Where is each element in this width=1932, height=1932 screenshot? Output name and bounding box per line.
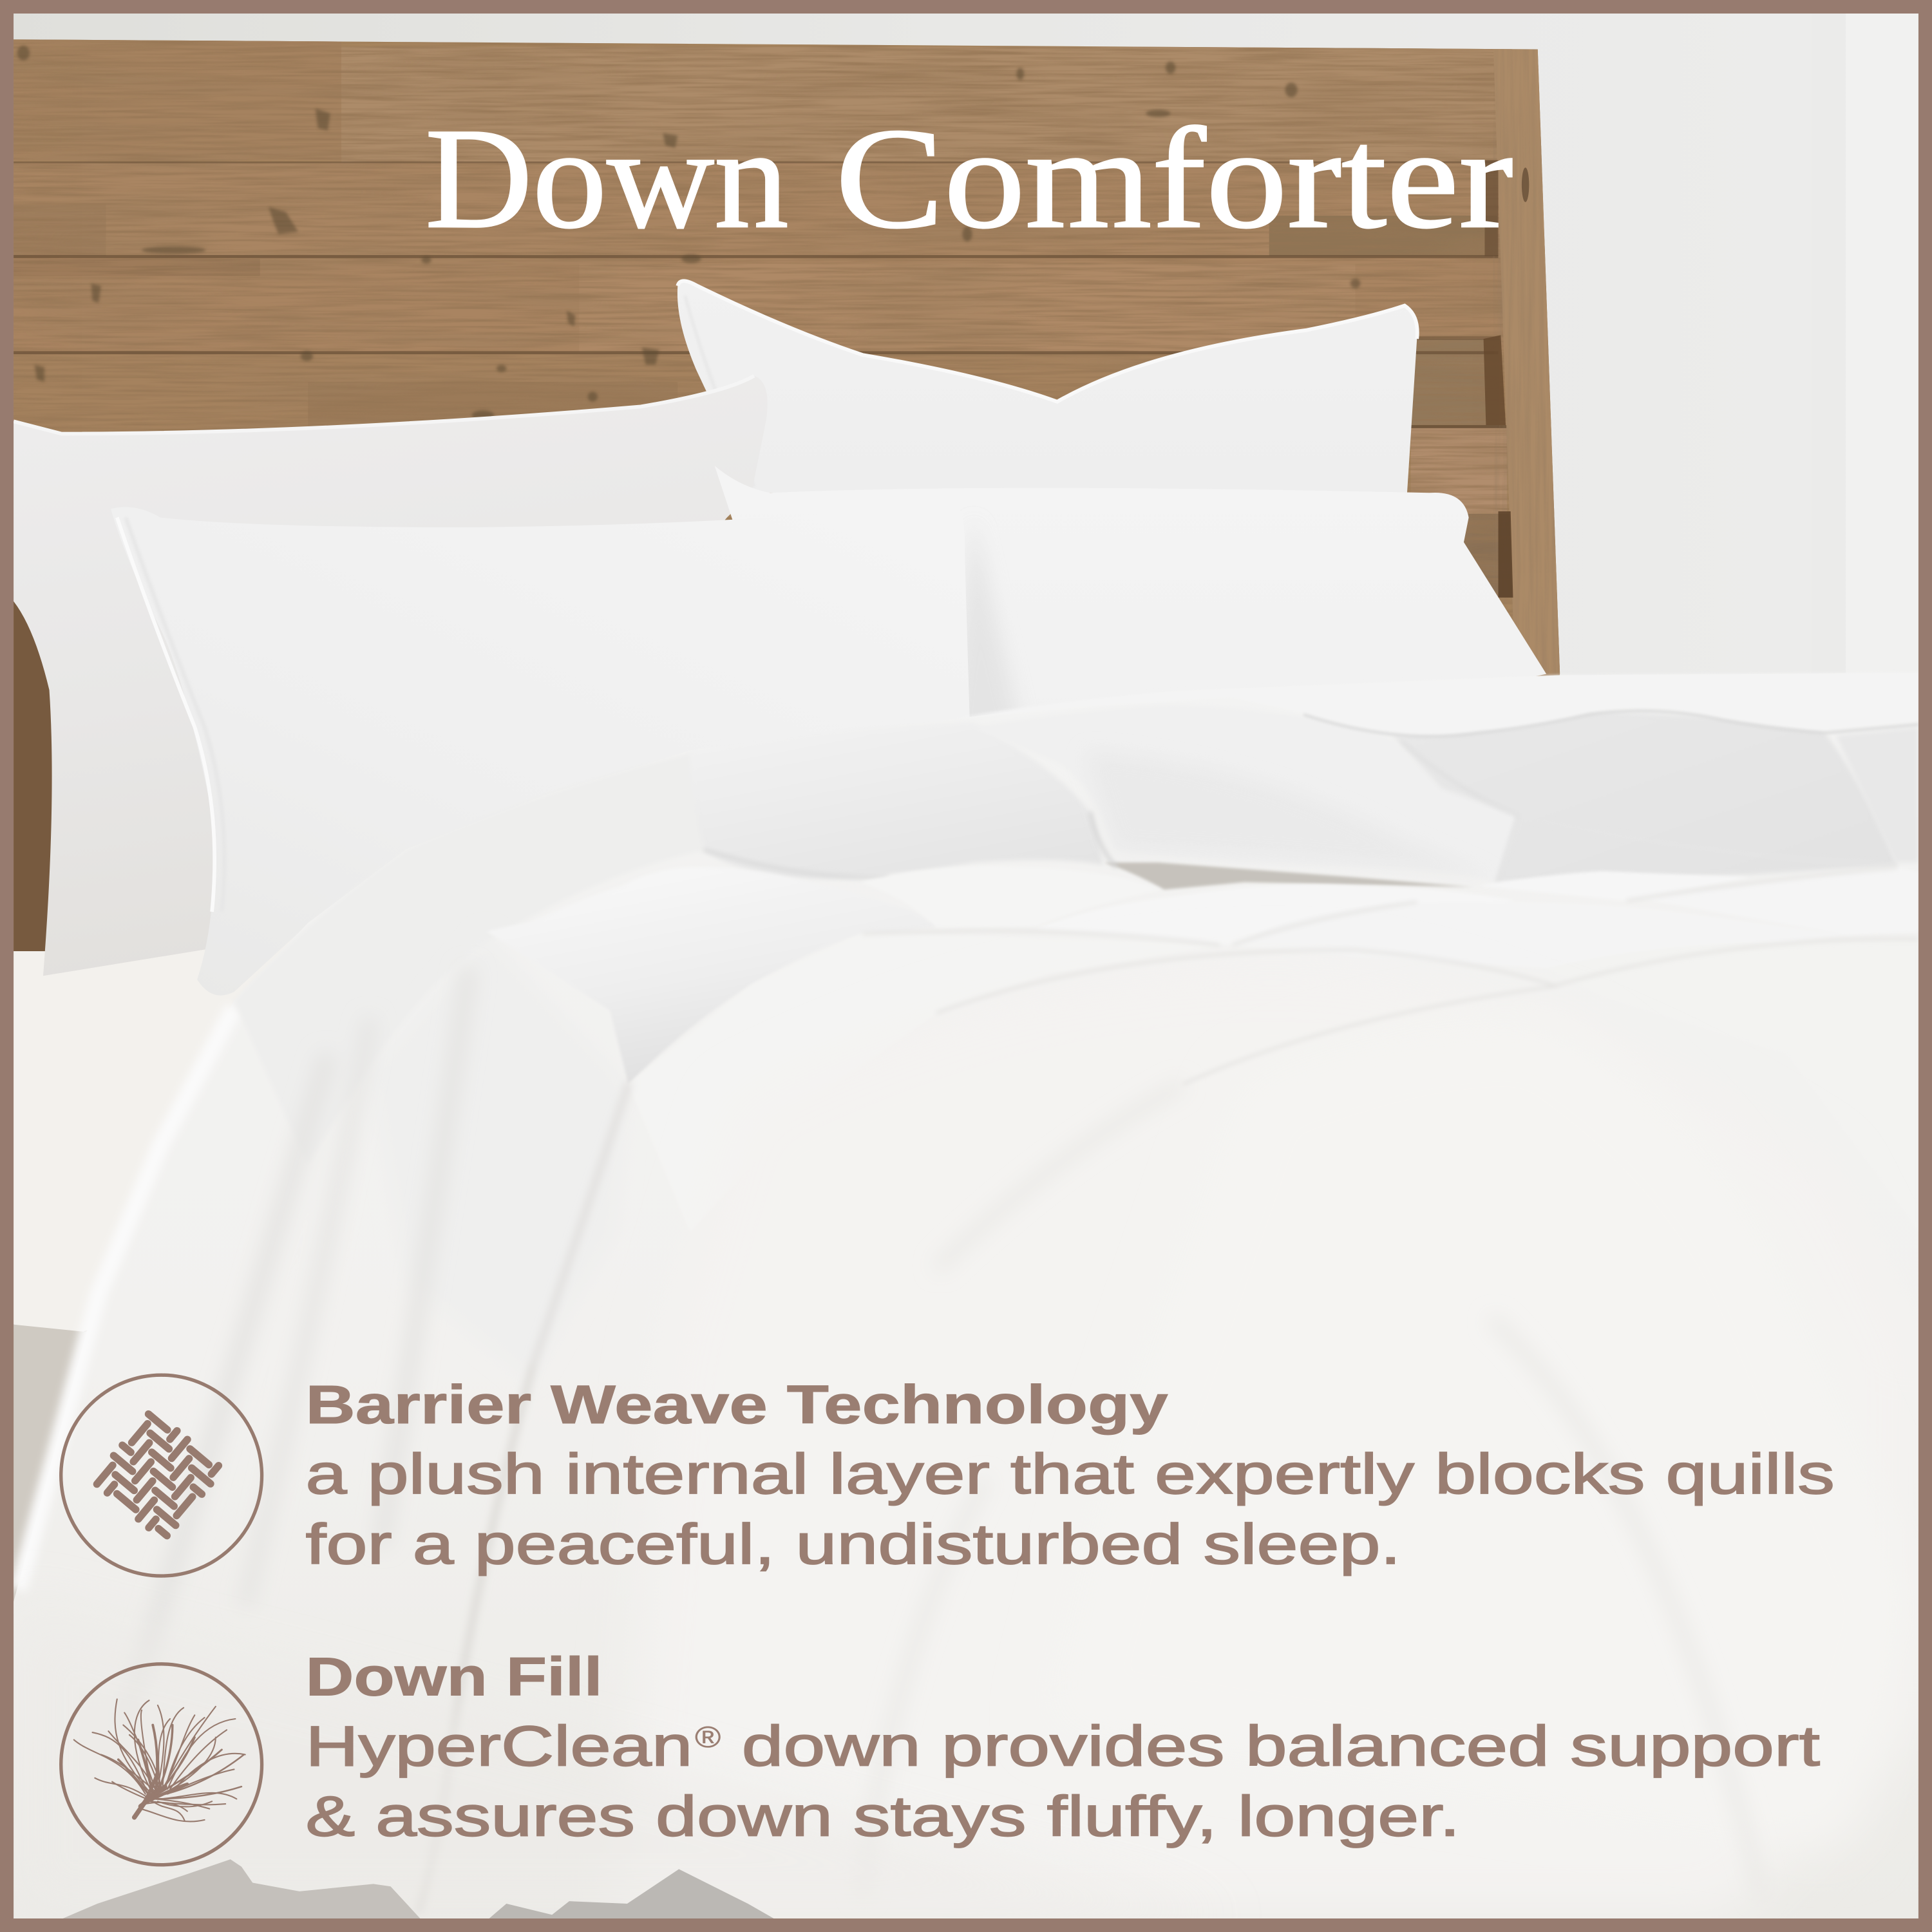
window frame at right [1811, 14, 1932, 679]
lower shading [14, 1602, 1232, 1918]
wood mottling [405, 42, 1558, 637]
description: barrier weave [305, 1442, 1835, 1576]
description: down fill: & assures down stays fluffy, longer. [305, 1785, 1460, 1848]
centre ball fold [860, 866, 1160, 929]
description: down fill [305, 1714, 1820, 1848]
wood planks [14, 39, 1513, 598]
scalloped band shadow [1303, 711, 1918, 737]
comforter bright left edge [19, 1008, 234, 1589]
feature: barrier weave technology [61, 1374, 1835, 1576]
description: down fill: HyperClean [305, 1714, 692, 1778]
description: barrier weave: a plush internal layer that expertly blocks quills [305, 1442, 1835, 1506]
icon: woven fabric [61, 1375, 262, 1576]
front pillow right [715, 466, 1546, 739]
feature: down fill [61, 1647, 1820, 1865]
title: Comforter [835, 99, 1513, 258]
knots [17, 46, 1360, 420]
creases in upper section [705, 742, 1895, 882]
floor beneath comforter hem [63, 1859, 774, 1918]
floor [14, 1325, 135, 1614]
title: Down [425, 99, 788, 258]
front left pad [629, 933, 1220, 1232]
dark crack behind ball [1104, 862, 1472, 889]
front pillow left [111, 503, 1023, 996]
wooden headboard [14, 39, 1567, 976]
main left crease [419, 1084, 629, 1910]
upper puff 2 inner shading [1084, 752, 1497, 880]
description: down fill: ® [695, 1720, 721, 1754]
lower left wood behind pillows [14, 591, 53, 961]
wood grain texture [14, 40, 1560, 667]
back pillow centre [677, 281, 1417, 493]
description: down fill: down provides balanced support [742, 1714, 1820, 1778]
wall [14, 14, 1918, 675]
upper puff 2 [973, 705, 1518, 882]
bed sheet [14, 887, 370, 1337]
comforter main body [14, 673, 1918, 1918]
soft lower seams [862, 1084, 1762, 1897]
left curved band [234, 752, 706, 1164]
pad seams [862, 867, 1918, 1084]
heading: Barrier Weave Technology: Barrier Weave Technology [305, 1374, 1168, 1435]
white fold [487, 867, 936, 1084]
back pillow left [14, 376, 768, 976]
upper puff 1 [690, 722, 1103, 878]
upper right puff [1836, 727, 1918, 862]
right lobes [1035, 867, 1918, 1232]
left drape folds [123, 973, 468, 1725]
upper puff 3 [1392, 712, 1897, 882]
heading: Down Fill: Down Fill [305, 1647, 603, 1707]
left drape shaded fold [370, 931, 629, 1380]
headboard right post [1484, 50, 1567, 690]
title [425, 99, 1513, 258]
icon: down plume [61, 1664, 262, 1865]
front pad highlight [616, 970, 1918, 1918]
plank seams [14, 162, 1507, 428]
description: barrier weave: for a peaceful, undisturbed sleep. [305, 1512, 1401, 1576]
comforter top folded band [949, 673, 1918, 735]
